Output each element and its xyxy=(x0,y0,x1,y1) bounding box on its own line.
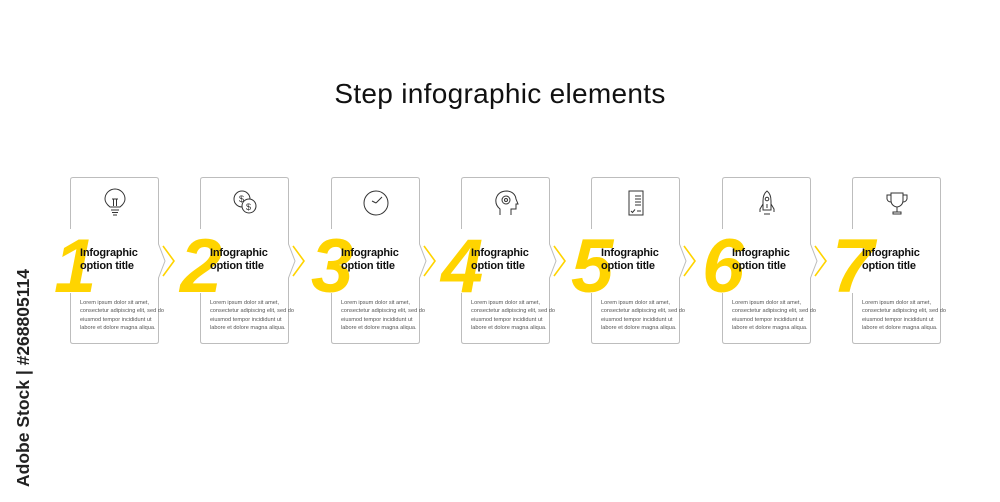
step title xyxy=(471,247,529,272)
step title: option title xyxy=(601,260,655,272)
step 4 xyxy=(440,177,566,344)
step title xyxy=(80,247,138,272)
number: 6 xyxy=(702,224,744,309)
step 2 xyxy=(178,177,305,344)
description: Lorem ipsum dolor sit amet, consectetur adipiscing elit, sed do eiusmod tempor incididunt ut labore et dolore magna aliqua. xyxy=(210,300,294,331)
step title: option title xyxy=(210,260,264,272)
step title: Infographic xyxy=(341,247,399,259)
icon: clock xyxy=(364,190,388,216)
description: Lorem ipsum dolor sit amet, consectetur adipiscing elit, sed do eiusmod tempor incididunt ut labore et dolore magna aliqua. xyxy=(862,300,946,331)
step title: option title xyxy=(341,260,395,272)
watermark side text: Adobe Stock | #268805114 xyxy=(13,269,33,487)
description: Lorem ipsum dolor sit amet, consectetur adipiscing elit, sed do eiusmod tempor incididunt ut labore et dolore magna aliqua. xyxy=(80,300,164,331)
step title: option title xyxy=(862,260,916,272)
step title xyxy=(341,247,399,272)
title: Step infographic elements xyxy=(334,78,666,109)
description: Lorem ipsum dolor sit amet, consectetur adipiscing elit, sed do eiusmod tempor incididunt ut labore et dolore magna aliqua. xyxy=(601,300,685,331)
step title: Infographic xyxy=(210,247,268,259)
icon: coins: $ xyxy=(246,202,251,212)
step title: option title xyxy=(732,260,786,272)
number: 5 xyxy=(571,224,613,309)
step 1 xyxy=(54,177,175,344)
icon: rocket xyxy=(760,190,774,215)
number: 3 xyxy=(311,224,353,309)
icon: coins xyxy=(234,190,256,214)
description: Lorem ipsum dolor sit amet, consectetur adipiscing elit, sed do eiusmod tempor incididunt ut labore et dolore magna aliqua. xyxy=(341,300,425,331)
icon: head with gear xyxy=(495,190,519,215)
step title: option title xyxy=(80,260,134,272)
step title xyxy=(862,247,920,272)
icon: trophy xyxy=(886,192,908,214)
number: 4 xyxy=(441,224,483,309)
icon: light bulb xyxy=(104,188,126,216)
step title xyxy=(210,247,268,272)
step title xyxy=(732,247,790,272)
step title xyxy=(601,247,659,272)
description: Lorem ipsum dolor sit amet, consectetur adipiscing elit, sed do eiusmod tempor incididunt ut labore et dolore magna aliqua. xyxy=(471,300,555,331)
icon: document xyxy=(628,190,644,216)
step 6 xyxy=(702,177,827,344)
step title: Infographic xyxy=(732,247,790,259)
step title: option title xyxy=(471,260,525,272)
step title: Infographic xyxy=(862,247,920,259)
step title: Infographic xyxy=(471,247,529,259)
icon: coins: $ xyxy=(239,194,244,204)
number: 7 xyxy=(832,224,874,309)
step 3 xyxy=(311,177,436,344)
step 5 xyxy=(571,177,696,344)
step title: Infographic xyxy=(601,247,659,259)
number: 2 xyxy=(180,224,222,309)
description: Lorem ipsum dolor sit amet, consectetur adipiscing elit, sed do eiusmod tempor incididunt ut labore et dolore magna aliqua. xyxy=(732,300,816,331)
step title: Infographic xyxy=(80,247,138,259)
number: 1 xyxy=(54,224,96,309)
step 7 xyxy=(832,177,946,344)
